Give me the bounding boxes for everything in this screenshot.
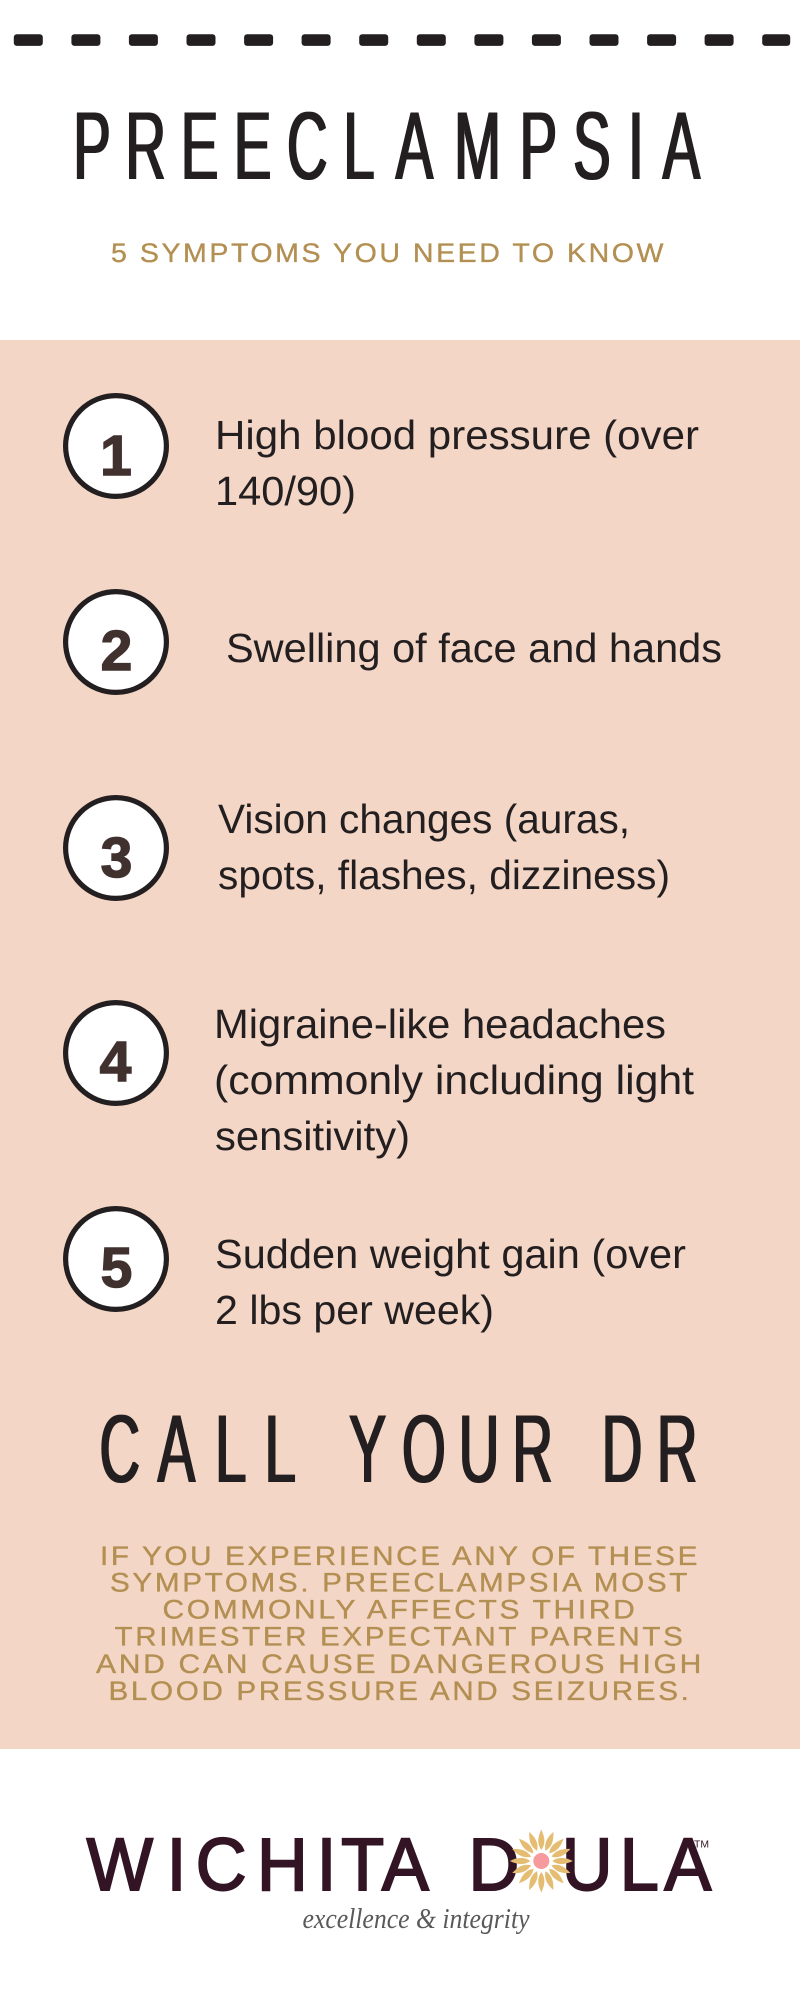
number badge 2: 2	[101, 619, 132, 683]
number badge 4: 4	[100, 1030, 132, 1094]
icon: gold sunburst with pink centre	[510, 1830, 573, 1892]
logo wordmark: WICHITA DOULA	[87, 1824, 711, 1906]
number badge 3: 3	[101, 826, 132, 890]
number badge 1: 1	[100, 424, 132, 488]
symptom 1 text	[215, 412, 699, 514]
symptom 4 text: sensitivity)	[215, 1113, 410, 1159]
symptom 2	[66, 592, 722, 692]
symptom 4 text	[214, 1001, 695, 1159]
symptom 5 text: Sudden weight gain (over	[215, 1231, 686, 1277]
symptom 1 text: 140/90)	[215, 468, 356, 514]
symptom 3 text	[218, 796, 670, 898]
symptom 1	[66, 396, 699, 514]
warning paragraph: BLOOD PRESSURE AND SEIZURES.	[108, 1676, 692, 1706]
logo: Wichita Doula	[87, 1824, 711, 1935]
symptom 4	[66, 1001, 695, 1159]
number badge 5	[66, 1209, 166, 1309]
symptom 5	[66, 1209, 686, 1333]
warning paragraph: COMMONLY AFFECTS THIRD	[162, 1595, 638, 1625]
number badge 3	[66, 798, 166, 898]
subtitle: 5 SYMPTOMS YOU NEED TO KNOW	[111, 238, 666, 268]
warning paragraph	[96, 1541, 704, 1706]
number badge 2	[66, 592, 166, 692]
symptom 4 text: (commonly including light	[214, 1057, 695, 1103]
warning paragraph: TRIMESTER EXPECTANT PARENTS	[114, 1622, 686, 1652]
symptom 1 text: High blood pressure (over	[215, 412, 699, 458]
panel: symptoms and call to action	[0, 340, 800, 1749]
symptom 4 text: Migraine-like headaches	[214, 1001, 666, 1047]
number badge 1	[66, 396, 166, 496]
warning paragraph: AND CAN CAUSE DANGEROUS HIGH	[96, 1649, 704, 1679]
symptom 3 text: spots, flashes, dizziness)	[218, 852, 670, 898]
tagline: excellence & integrity	[302, 1904, 530, 1935]
warning paragraph: SYMPTOMS. PREECLAMPSIA MOST	[110, 1568, 690, 1598]
warning paragraph: IF YOU EXPERIENCE ANY OF THESE	[100, 1541, 700, 1571]
number badge 5: 5	[101, 1236, 132, 1300]
symptom 2 text: Swelling of face and hands	[226, 625, 722, 671]
symptom 5 text: 2 lbs per week)	[215, 1287, 494, 1333]
call to action heading: CALL YOUR DR	[100, 1394, 698, 1503]
symptom 3 text: Vision changes (auras,	[218, 796, 630, 842]
trademark mark: TM	[694, 1838, 709, 1850]
symptom 3	[66, 796, 670, 898]
title: PREECLAMPSIA	[73, 91, 700, 200]
dashed top border	[14, 34, 790, 46]
number badge 4	[66, 1003, 166, 1103]
symptom 5 text	[215, 1231, 686, 1333]
